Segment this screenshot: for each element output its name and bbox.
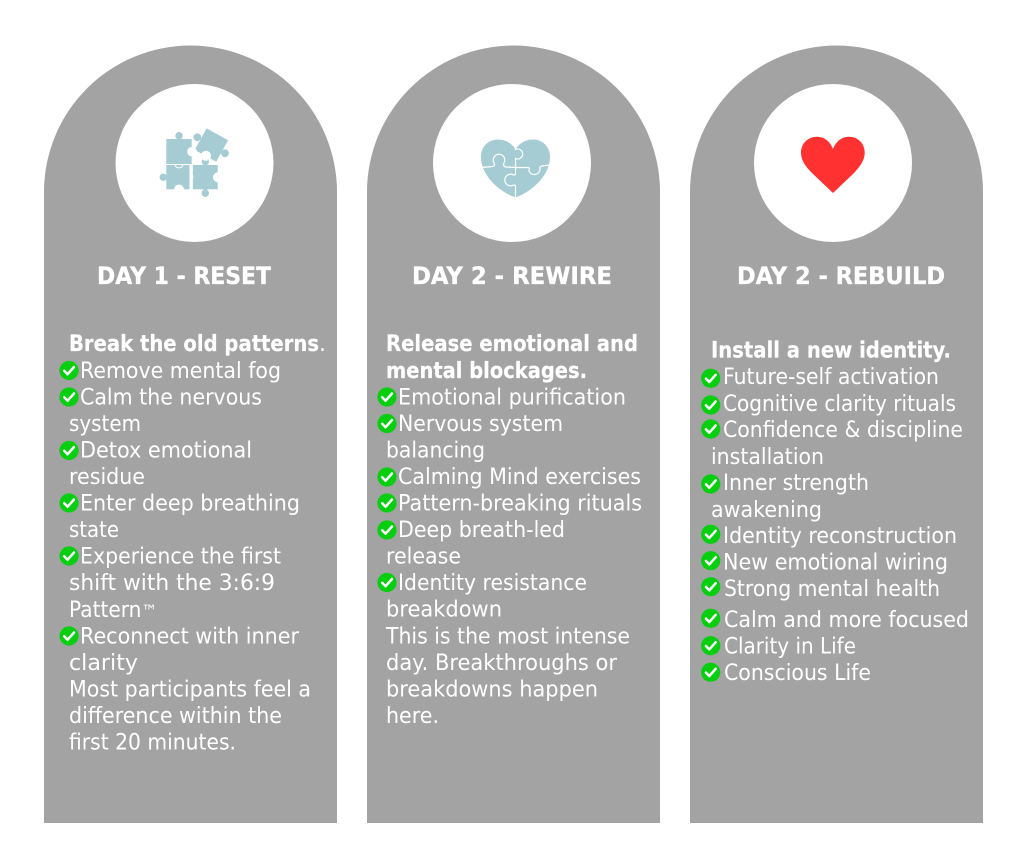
text block: rebuild list: Install a new identity. (711, 338, 951, 364)
text block: reset list: system (69, 412, 141, 437)
text block: reset list: state (69, 518, 119, 543)
text block: rewire list: Deep breath-led (398, 518, 565, 543)
text block: reset list: Most participants feel a (69, 678, 311, 702)
text block: rebuild list: Calm and more focused (724, 608, 969, 633)
text block: rewire list: release (386, 544, 461, 570)
text block: reset list: first 20 minutes. (69, 730, 236, 756)
heading: DAY 1 - RESET (97, 262, 272, 290)
text block: rewire list: Nervous system (398, 412, 563, 437)
text block: rewire list: Emotional purification (398, 386, 626, 410)
text block: reset list: Remove mental fog (80, 359, 281, 384)
text block: rewire list: Pattern-breaking rituals (398, 492, 642, 516)
text block: rewire list: Identity resistance (398, 571, 587, 596)
text block: reset list: Experience the first (80, 544, 281, 570)
text block: rewire list: breakdown (386, 598, 502, 622)
text block: reset list (59, 332, 326, 756)
text block: rewire list: breakdowns happen (386, 678, 598, 702)
heading: DAY 2 - REWIRE (412, 262, 612, 290)
text block: rebuild list: Clarity in Life (724, 634, 856, 660)
icon: puzzle heart (433, 84, 591, 242)
text block: reset list: clarity (69, 651, 138, 676)
text block: rebuild list: Cognitive clarity rituals (723, 392, 956, 417)
text block: reset list: difference within the (69, 704, 282, 729)
text block: reset list: . (319, 332, 326, 357)
text block: rebuild list: Confidence & discipline (723, 418, 963, 443)
text block: rewire list: Calming Mind exercises (398, 465, 641, 490)
card background (690, 45, 983, 823)
text block: rewire list: here. (386, 704, 439, 729)
text block: reset list: Enter deep breathing (80, 492, 300, 516)
text block: rebuild list: awakening (711, 498, 822, 523)
card background (44, 46, 337, 823)
text block: rebuild list: Future-self activation (723, 365, 939, 390)
panel: day 2 rebuild (690, 45, 983, 823)
text block: rebuild list: Conscious Life (724, 661, 871, 686)
text block: reset list: Reconnect with inner (80, 624, 300, 650)
text block: reset list: Calm the nervous (80, 386, 262, 410)
text block: reset list: shift with the 3:6:9 (69, 571, 275, 596)
text block: rewire list: balancing (386, 438, 485, 464)
panel: day 2 rewire (367, 45, 660, 823)
icon: red heart (754, 84, 912, 242)
text block: rebuild list: New emotional wiring (723, 550, 948, 576)
text block: reset list: Detox emotional (80, 438, 252, 464)
panel: day 1 reset (44, 46, 337, 823)
icon: puzzle pieces (116, 84, 274, 242)
text block: rewire list: day. Breakthroughs or (386, 651, 618, 676)
text block: rebuild list: Strong mental health (724, 577, 940, 602)
text block: reset list: Break the old patterns (69, 332, 319, 357)
text block: reset list: residue (69, 465, 145, 490)
card background (367, 45, 660, 823)
text block: rewire list: This is the most intense (385, 624, 630, 650)
text block: rebuild list: Inner strength (723, 471, 869, 496)
text block: rebuild list: installation (711, 445, 824, 470)
text block: rebuild list: Identity reconstruction (723, 524, 957, 549)
text block: rewire list (377, 332, 642, 729)
text block: reset list: Pattern™ (69, 598, 157, 623)
heading: DAY 2 - REBUILD (737, 262, 945, 290)
text block: rewire list: mental blockages. (386, 359, 587, 384)
text block: rebuild list (701, 338, 969, 686)
text block: rewire list: Release emotional and (386, 332, 638, 357)
